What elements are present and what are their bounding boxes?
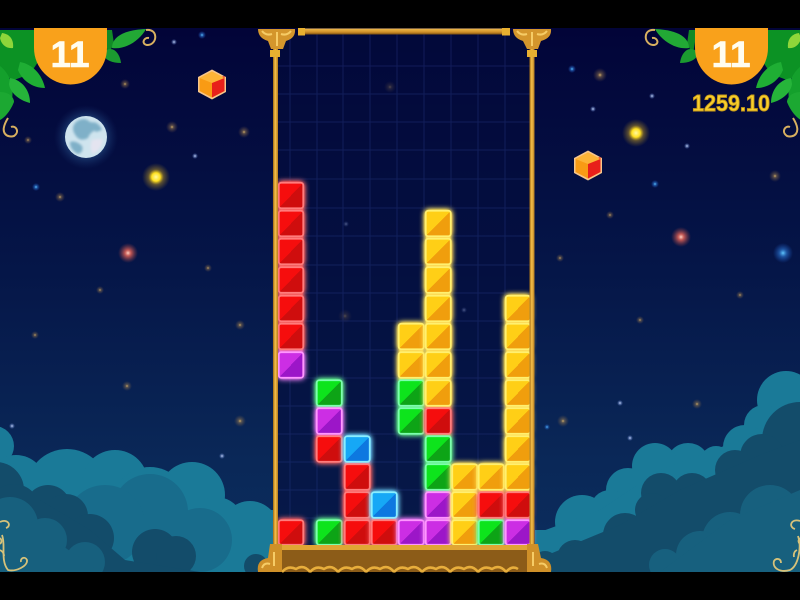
blocks: column 8	[479, 464, 504, 545]
foliage: top left	[0, 29, 155, 136]
blocks: column 7	[452, 464, 477, 545]
golden frame	[258, 28, 551, 572]
glowing star: yellow right	[622, 119, 650, 147]
corner scroll: bottom right	[774, 520, 800, 571]
score medallion left	[34, 28, 107, 84]
floating cube right	[574, 150, 602, 180]
blocks: column 4	[372, 492, 397, 545]
score value: 1259.10	[692, 90, 770, 116]
level number right: 11	[711, 34, 751, 75]
blocks: column 9	[506, 296, 530, 545]
stars	[9, 31, 795, 459]
blocks: column 6	[426, 211, 451, 545]
glowing star: blue right	[773, 243, 793, 263]
blocks: column 1	[279, 183, 303, 545]
moon	[58, 108, 114, 166]
level number left: 11	[50, 34, 90, 75]
floating cube left	[198, 70, 226, 100]
glowing star: red right	[671, 227, 691, 247]
game board	[276, 34, 532, 546]
clouds: left	[0, 426, 279, 582]
blocks: column 5	[399, 324, 424, 545]
score medallion right	[695, 28, 768, 84]
corner scroll: bottom left	[0, 521, 27, 570]
glowing star: red left	[118, 243, 138, 263]
blocks: column 3	[345, 436, 370, 545]
blocks: column 2	[317, 380, 342, 545]
glowing star: yellow left	[142, 163, 170, 191]
foliage: top right	[646, 29, 800, 136]
clouds: right	[531, 371, 800, 581]
